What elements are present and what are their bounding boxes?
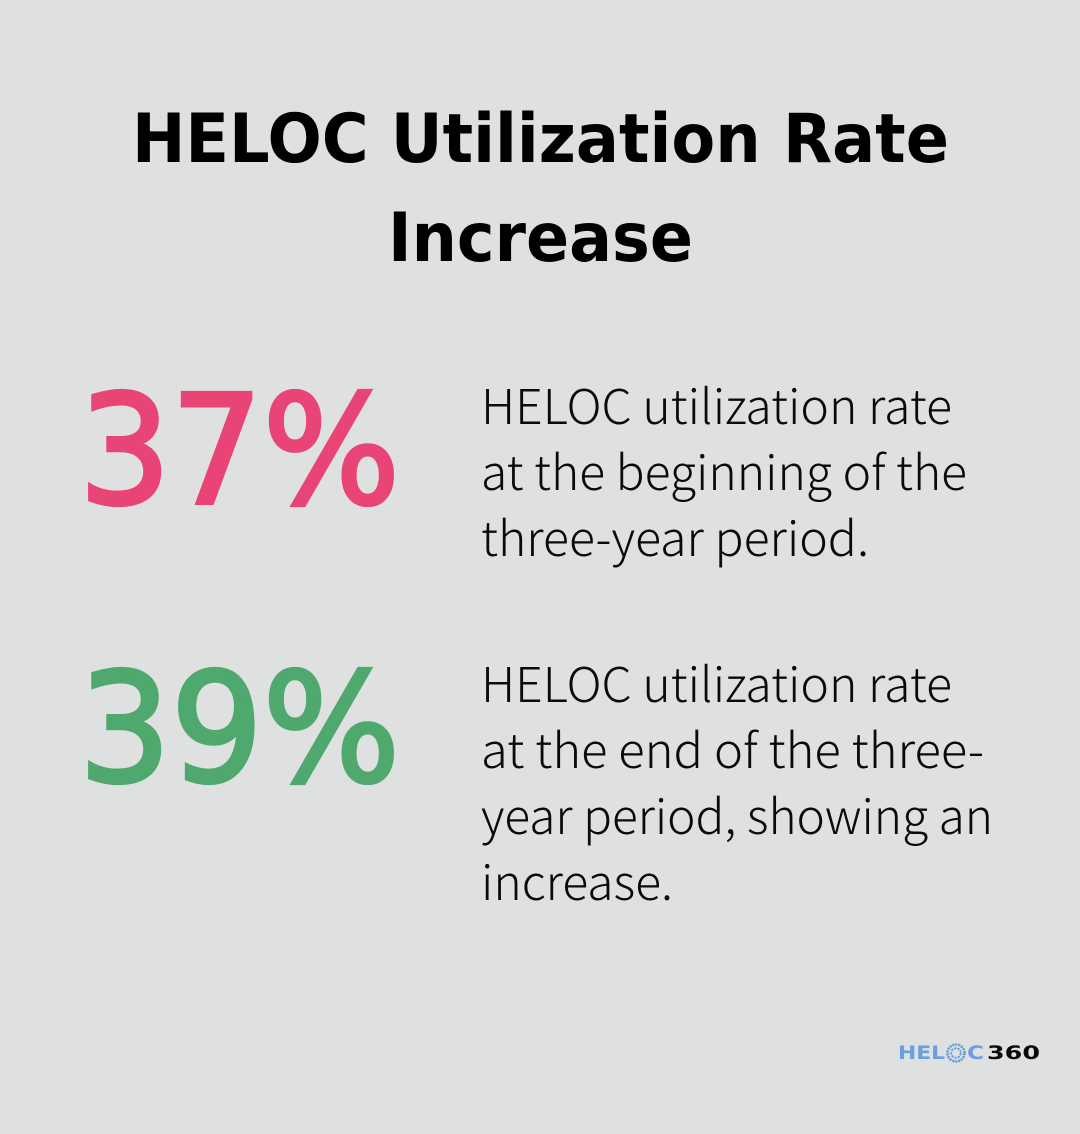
title: HELOC Utilization Rate: [132, 100, 949, 179]
text block: 37% description: HELOC utilization rate: [481, 368, 952, 438]
stat: 39%: 39%: [79, 641, 400, 817]
text block: 39% description: increase.: [481, 844, 673, 914]
text block: 37% description: at the beginning of the: [481, 434, 967, 504]
logo: HELOC360: 360: [987, 1042, 1040, 1064]
text block: 39% description: [481, 646, 993, 914]
text block: 37% description: [481, 368, 967, 570]
text block: 39% description: at the end of the three-: [481, 712, 984, 782]
text block: 39% description: HELOC utilization rate: [481, 646, 952, 716]
logo: HELOC360: C: [967, 1042, 984, 1064]
text block: 39% description: year period, showing an: [481, 778, 993, 848]
icon: logo swirl: [948, 1044, 964, 1062]
text block: 37% description: three-year period.: [481, 500, 869, 570]
logo: HELOC360: [898, 1042, 1040, 1064]
logo: HELOC360: HEL: [898, 1042, 945, 1064]
title: Increase: [388, 199, 693, 278]
stat: 37%: 37%: [79, 363, 400, 539]
title: [132, 100, 949, 278]
